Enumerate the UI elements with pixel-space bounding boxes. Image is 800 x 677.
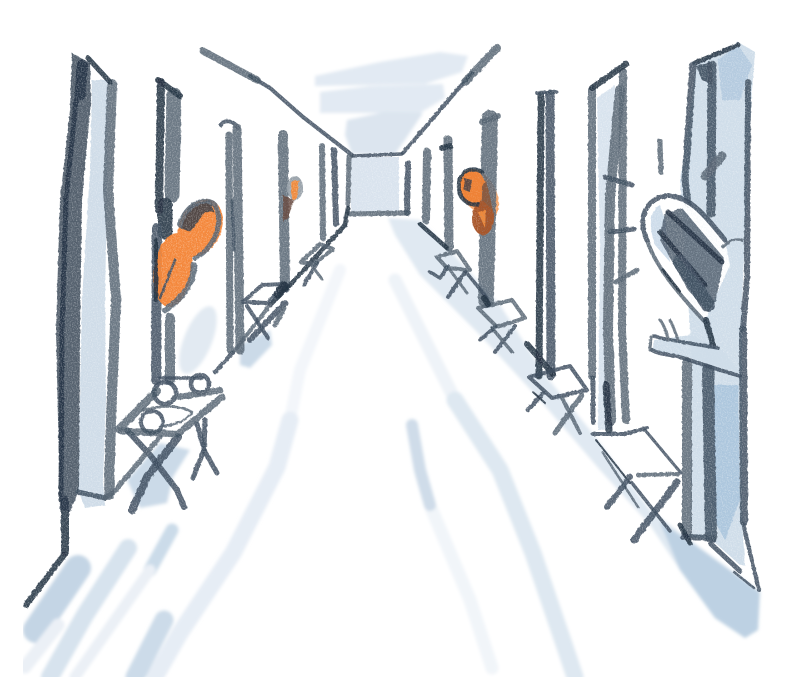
floor stroke: centre left top [290,270,340,420]
stool: right far [430,251,470,297]
person: right orange head [459,169,494,235]
floor stroke: centre short [432,510,492,668]
stool: left large [105,375,222,510]
floor stroke: centre short top [412,425,430,505]
floor stroke: centre right top [395,280,455,400]
wall base line: left [235,208,348,350]
shadow: pillar wall [178,306,218,374]
stool: left medium [243,284,285,340]
floor stroke: centre right [455,400,575,677]
floor stroke: lower left 3 [150,530,172,570]
floor stroke: lower left 2 [50,548,128,677]
stool: left small [301,244,333,285]
floor stroke: lower left 3 tail [75,570,150,677]
pillar: right with dashes [592,64,637,430]
shadow: small stool [240,330,272,368]
pillar: left second [156,80,180,380]
pillar: right dark [527,92,556,376]
shadow: right floor band [388,217,692,565]
pillar: left fourth [283,135,285,288]
shadow: large stool [127,443,190,508]
pillar: left third [215,121,240,372]
floor stroke: lower left 4 [135,620,164,677]
pillars: far left thin [322,146,336,238]
wall base line: right [420,224,487,298]
stool: right near [528,366,587,433]
floor stroke: lower left 5 [25,625,58,667]
person: small orange head [283,176,303,222]
pillar: right foreground [660,42,759,590]
person: left orange head [149,192,232,310]
floor stroke: lower left 1 [36,568,78,630]
pillar: right centre with orange head [460,116,499,300]
floor stroke: centre left [155,420,290,677]
floor washes [25,218,760,677]
shadow: right floor band near end [660,522,760,638]
pillar: left large [26,53,116,605]
pillars: far right thin [426,140,450,247]
ceiling lines [203,48,497,155]
ceiling wash [315,52,468,154]
stool: right large foreground [593,428,681,540]
person: right foreground head and arm [643,196,742,376]
back wall [348,154,409,214]
stool: right middle [478,298,525,352]
